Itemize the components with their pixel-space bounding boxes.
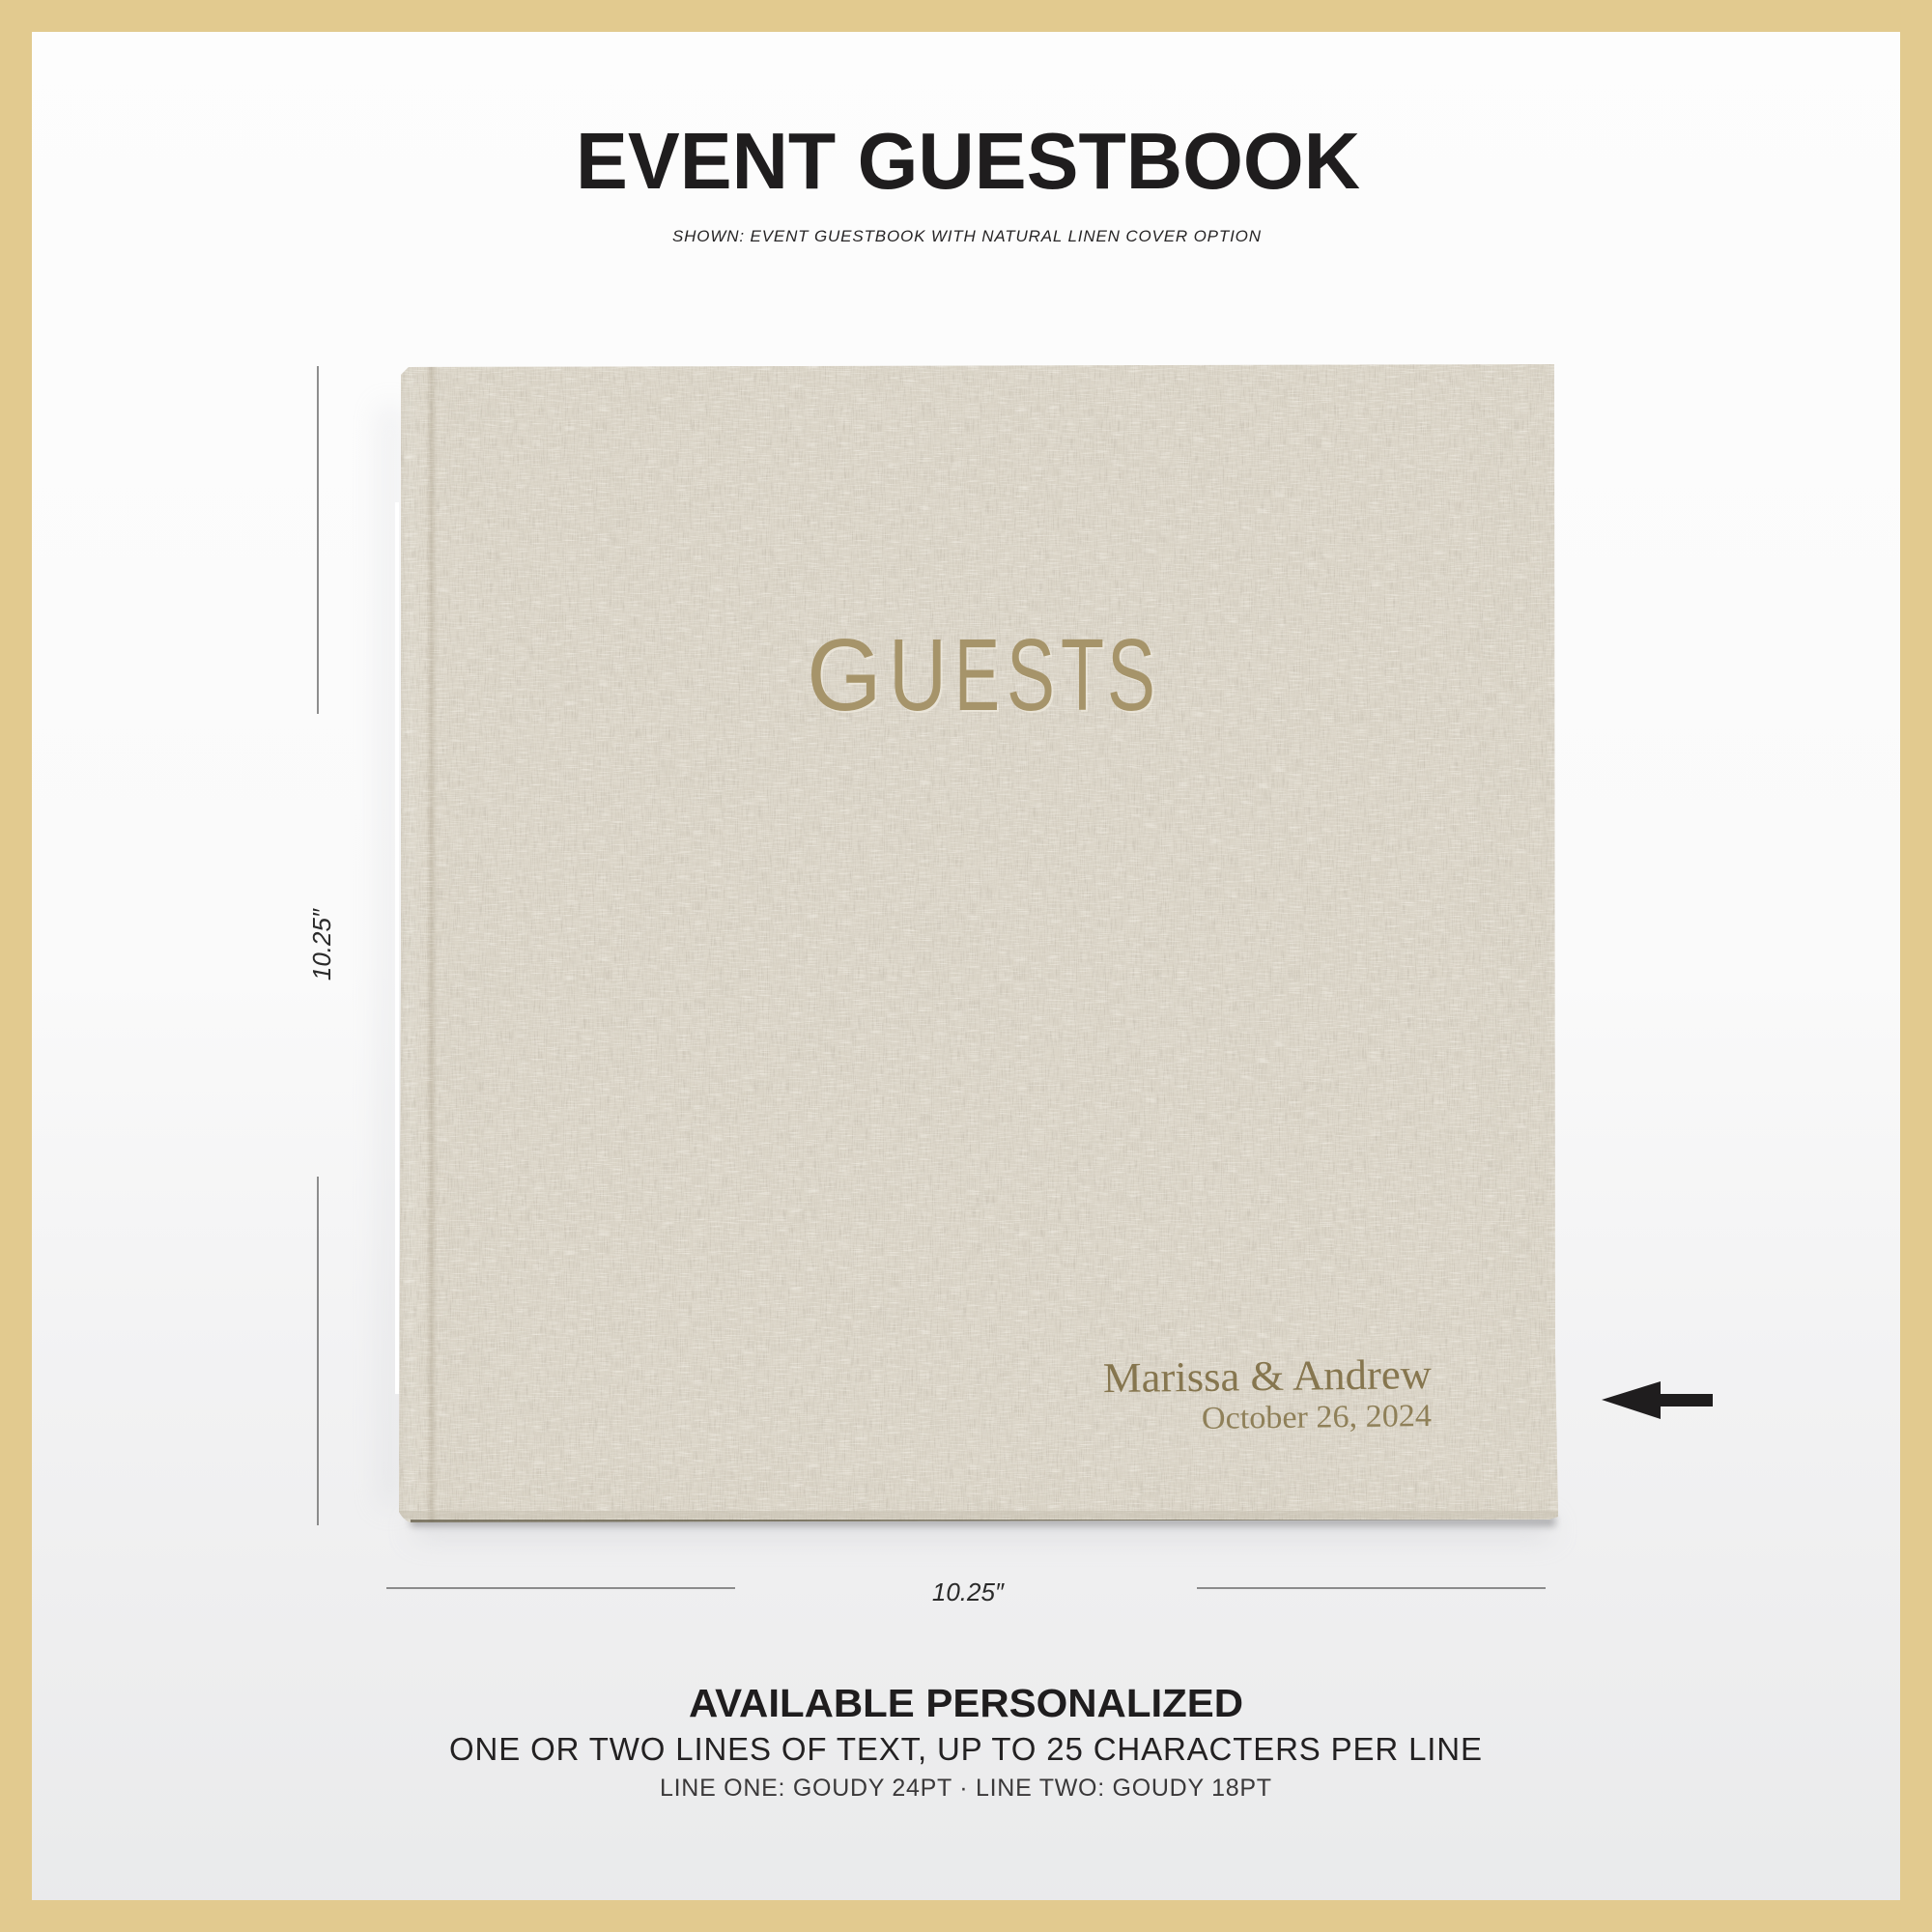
debossed word GUESTS (807, 618, 1157, 734)
debossed word GUESTS: S (1109, 620, 1157, 734)
title: EVENT GUESTBOOK (576, 116, 1360, 206)
debossed word GUESTS: S (1009, 620, 1057, 734)
personalized date line: October 26, 2024 (1202, 1399, 1432, 1436)
debossed word GUESTS: U (889, 618, 947, 732)
debossed word GUESTS: E (954, 618, 1000, 732)
debossed word GUESTS: S (1007, 618, 1055, 732)
linen cover (396, 362, 1561, 1525)
book shadow (379, 406, 1555, 1537)
subtitle: SHOWN: EVENT GUESTBOOK WITH NATURAL LINEN COVER OPTION (672, 227, 1262, 245)
personalization heading: AVAILABLE PERSONALIZED (689, 1681, 1243, 1725)
icon: arrow pointing at personalization (1602, 1381, 1713, 1419)
personalization details: ONE OR TWO LINES OF TEXT, UP TO 25 CHARACTERS PER LINE (449, 1731, 1482, 1767)
bottom board edge (399, 1511, 1558, 1519)
page edge sliver (395, 502, 399, 1394)
debossed word GUESTS: G (807, 618, 882, 732)
debossed word GUESTS: G (809, 620, 884, 734)
debossed word GUESTS: T (1063, 620, 1106, 734)
font specification line: LINE ONE: GOUDY 24PT · LINE TWO: GOUDY 18PT (660, 1775, 1271, 1802)
personalized names line: Marissa & Andrew (1103, 1350, 1432, 1402)
debossed word GUESTS: U (891, 620, 949, 734)
width dimension: 10.25″ (932, 1577, 1005, 1606)
debossed word GUESTS: T (1061, 618, 1104, 732)
book with linen cover (379, 362, 1561, 1537)
debossed word GUESTS: E (956, 620, 1002, 734)
height dimension: 10.25″ (307, 908, 336, 980)
debossed word GUESTS: S (1107, 618, 1155, 732)
spine hinge (399, 362, 438, 1525)
